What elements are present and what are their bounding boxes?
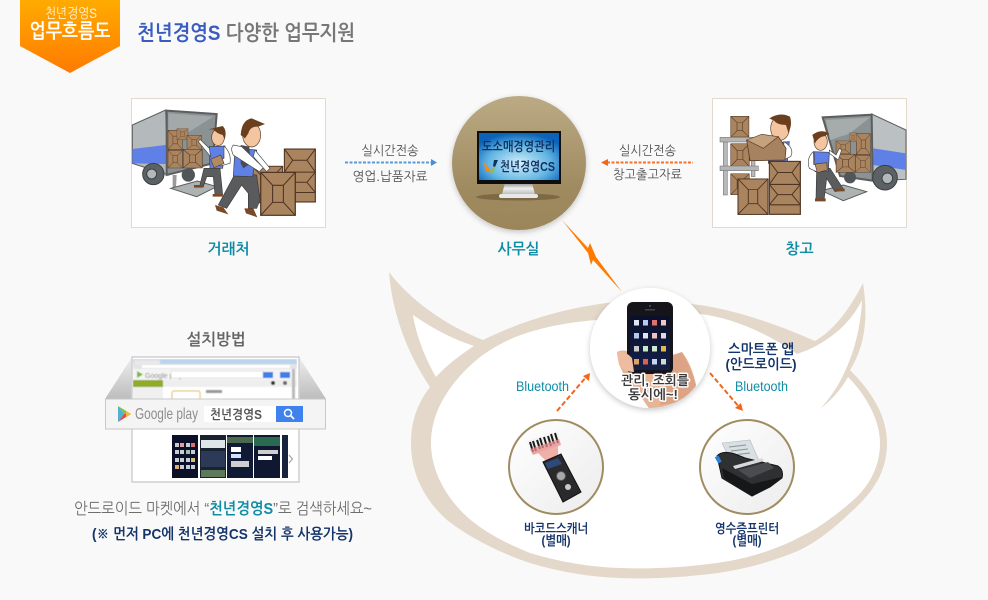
arrow: scanner to phone [557, 373, 590, 411]
badge: 업무흐름도 [20, 0, 120, 73]
label: 바코드스캐너: (별매) [542, 533, 570, 548]
label: Bluetooth right: Bluetooth [735, 378, 788, 394]
icon: google play triangle [118, 406, 131, 422]
label: 거래처: 거래처 [208, 241, 250, 258]
icon: office monitor circle: 도소매경영관리 [482, 139, 555, 154]
icon: barcode scanner [509, 420, 603, 514]
note text: (※ 먼저 PC에 천년경영CS 설치 후 사용가능) [92, 526, 353, 543]
icon: shelf with boxes [720, 116, 758, 195]
search bar: 천년경영S [210, 407, 262, 422]
icon: back box stack [252, 149, 315, 203]
search bar: Google play [135, 406, 198, 423]
icon: worker pushing box [215, 118, 295, 217]
label: Bluetooth left: Bluetooth [516, 378, 569, 394]
title: 천년경영S 다양한 업무지원 [137, 22, 355, 45]
label: 사무실: 사무실 [498, 241, 540, 258]
arrow: 실시간전송 right: 실시간전송 [619, 143, 676, 158]
icon: worker with clipboard [194, 126, 230, 197]
arrow: phone to printer [710, 373, 743, 411]
arrow: 실시간전송 left [345, 143, 437, 184]
arrow: 실시간전송 left: 영업.납품자료 [352, 169, 428, 184]
arrow: 실시간전송 right: 창고출고자료 [613, 167, 682, 182]
speech bubble: cat-eared frame [389, 272, 887, 578]
label: 스마트폰 앱: 스마트폰 앱 [728, 341, 794, 357]
icon: office monitor circle: 천년경영CS [500, 159, 555, 174]
label: 영수증프린터 [715, 521, 779, 548]
panel: 설치방법 [74, 331, 372, 543]
search bar [106, 399, 326, 429]
badge: 업무흐름도: 업무흐름도 [30, 21, 111, 43]
icon: smartphone in hand: 관리, 조회를 [621, 373, 689, 388]
app screenshots [172, 435, 292, 478]
heading: 설치방법: 설치방법 [186, 331, 246, 349]
instruction text: 안드로이드 마켓에서 “천년경영S”로 검색하세요~ [74, 500, 372, 518]
panel: 창고 illustration [712, 98, 906, 228]
label: 스마트폰 앱 [726, 341, 796, 372]
icon: lightning bolt [562, 220, 622, 292]
arrow: 실시간전송 left: 실시간전송 [362, 143, 418, 158]
label: 영수증프린터: (별매) [732, 533, 762, 548]
illustration: browser screenshot [105, 357, 326, 482]
panel: 거래처 illustration [132, 98, 326, 228]
label: 스마트폰 앱: (안드로이드) [726, 356, 796, 372]
badge: 업무흐름도: 천년경영S [45, 5, 97, 21]
label: 창고: 창고 [786, 241, 814, 258]
icon: smartphone in hand: 동시에~! [628, 387, 678, 402]
icon: office monitor circle [452, 96, 586, 230]
label: 바코드스캐너: 바코드스캐너 [524, 521, 588, 536]
icon: receipt printer [700, 420, 794, 514]
illustration: browser screenshot: Google play [145, 373, 183, 380]
icon: truck with worker [808, 114, 906, 201]
icon: worker carrying carton [747, 115, 792, 163]
label: 바코드스캐너 [524, 521, 588, 548]
arrow: 실시간전송 right [601, 143, 693, 182]
label: 영수증프린터: 영수증프린터 [715, 521, 779, 536]
icon: smartphone in hand [590, 288, 710, 410]
app icons [634, 320, 666, 364]
icon: magnifier [284, 410, 294, 419]
icon: stacked crates [738, 161, 800, 214]
icon: delivery truck [132, 110, 217, 197]
